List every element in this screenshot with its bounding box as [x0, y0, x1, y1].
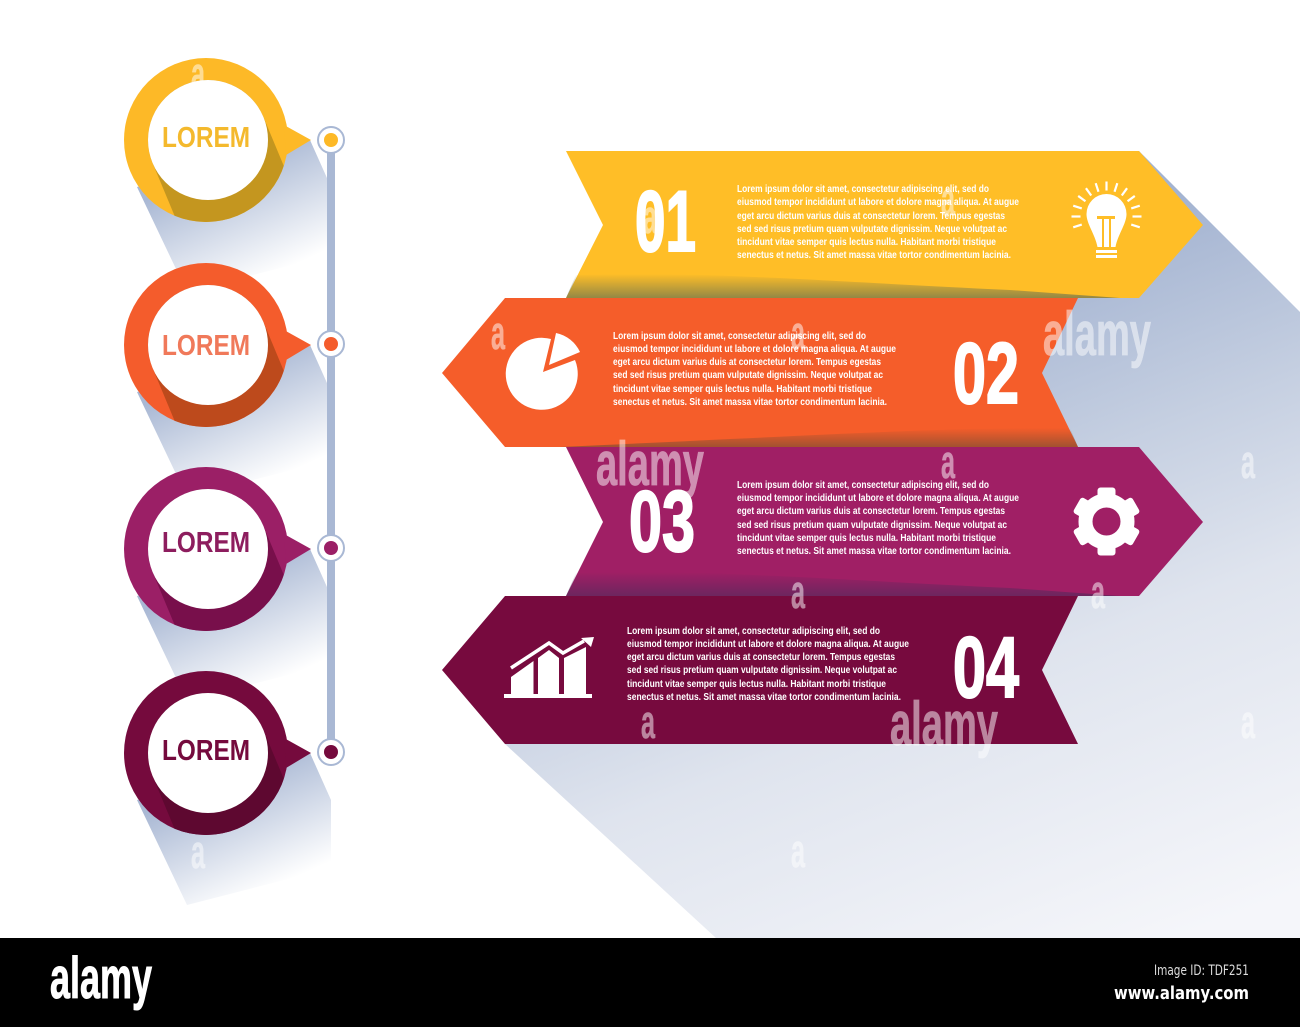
footer bar	[0, 938, 1300, 1027]
text block 04	[627, 626, 909, 703]
text block 01: tincidunt vitae semper quis lectus nulla. Habitant morbi tristique	[737, 237, 996, 248]
circle shadow 1	[137, 140, 331, 292]
circle 2: orange: LOREM	[162, 330, 250, 362]
icon: rising chart	[504, 637, 594, 698]
watermarks: alamy	[596, 430, 704, 499]
text block 04: eget arcu dictum varius duis at consectetur lorem. Tempus egestas	[627, 652, 895, 663]
circle 2: orange	[124, 263, 311, 427]
panel: banner 01	[566, 151, 1203, 298]
watermarks: a	[641, 695, 655, 748]
watermarks: a	[941, 172, 955, 225]
text block 02: eget arcu dictum varius duis at consectetur lorem. Tempus egestas	[613, 357, 881, 368]
image id: Image ID: TDF251	[1154, 963, 1249, 979]
circle shadow 2	[137, 345, 331, 497]
timeline node 4	[318, 739, 344, 765]
circle 3: purple: LOREM	[162, 527, 250, 559]
timeline node 2	[318, 331, 344, 357]
panel: banner 04	[442, 596, 1078, 744]
icon: gear	[1073, 488, 1140, 556]
text block 01	[737, 184, 1019, 261]
text block 02: eiusmod tempor incididunt ut labore et dolore magna aliqua. At augue	[613, 344, 896, 355]
website: www.alamy.com	[1114, 983, 1249, 1004]
text block 01: sed sed risus pretium quam vulputate dignissim. Neque volutpat ac	[737, 224, 1007, 235]
text block 04: senectus et netus. Sit amet massa vitae tortor condimentum lacinia.	[627, 692, 901, 703]
text block 01: Lorem ipsum dolor sit amet, consectetur adipiscing elit, sed do	[737, 184, 989, 195]
text block 02	[613, 331, 896, 408]
watermarks: a	[1091, 565, 1105, 618]
watermarks: a	[941, 435, 955, 488]
watermarks: a	[1241, 695, 1255, 748]
text block 03: eiusmod tempor incididunt ut labore et dolore magna aliqua. At augue	[737, 493, 1019, 504]
text block 04: eiusmod tempor incididunt ut labore et dolore magna aliqua. At augue	[627, 639, 909, 650]
panel: banner 03	[566, 447, 1203, 596]
text block 03: Lorem ipsum dolor sit amet, consectetur adipiscing elit, sed do	[737, 480, 989, 491]
text block 01: eiusmod tempor incididunt ut labore et dolore magna aliqua. At augue	[737, 197, 1019, 208]
text block 03	[737, 480, 1019, 557]
timeline node 3	[318, 535, 344, 561]
watermarks: a	[791, 824, 805, 877]
circle shadow 3	[137, 549, 331, 701]
watermarks: alamy	[890, 690, 998, 759]
circle 4: maroon: LOREM	[162, 735, 250, 767]
circle shadow 4	[137, 753, 331, 905]
watermarks: a	[643, 190, 657, 243]
panel: timeline of circles	[124, 58, 344, 905]
watermarks: alamy	[1043, 300, 1151, 369]
text block 04: Lorem ipsum dolor sit amet, consectetur adipiscing elit, sed do	[627, 626, 880, 637]
watermarks: a	[791, 565, 805, 618]
watermarks: a	[1241, 435, 1255, 488]
text block 03: tincidunt vitae semper quis lectus nulla. Habitant morbi tristique	[737, 533, 996, 544]
icon: pie chart	[506, 333, 580, 410]
text block 01: senectus et netus. Sit amet massa vitae tortor condimentum lacinia.	[737, 250, 1011, 261]
number 01: 01	[635, 174, 696, 270]
watermarks: a	[491, 306, 505, 359]
watermarks: a	[191, 825, 205, 878]
circle 1: yellow: LOREM	[162, 122, 250, 154]
number 04: 04	[953, 620, 1019, 716]
circle 1: yellow	[124, 58, 311, 222]
text block 01: eget arcu dictum varius duis at consectetur lorem. Tempus egestas	[737, 211, 1005, 222]
text block 02: sed sed risus pretium quam vulputate dignissim. Neque volutpat ac	[613, 370, 883, 381]
panel: banner 02	[442, 298, 1078, 447]
circle 4: maroon	[124, 671, 311, 835]
text block 02: Lorem ipsum dolor sit amet, consectetur adipiscing elit, sed do	[613, 331, 866, 342]
icon: light bulb	[1072, 182, 1142, 258]
text block 02: senectus et netus. Sit amet massa vitae tortor condimentum lacinia.	[613, 397, 887, 408]
long shadow behind banners	[505, 151, 1300, 938]
text block 04: sed sed risus pretium quam vulputate dignissim. Neque volutpat ac	[627, 665, 897, 676]
footer logo: alamy	[50, 946, 152, 1011]
text block 02: tincidunt vitae semper quis lectus nulla. Habitant morbi tristique	[613, 384, 872, 395]
circle 3: purple	[124, 467, 311, 631]
text block 04: tincidunt vitae semper quis lectus nulla. Habitant morbi tristique	[627, 679, 886, 690]
timeline node 1	[318, 127, 344, 153]
number 03: 03	[629, 474, 695, 570]
watermarks	[191, 47, 1255, 878]
text block 03: senectus et netus. Sit amet massa vitae tortor condimentum lacinia.	[737, 546, 1011, 557]
watermarks: a	[191, 47, 205, 100]
timeline line	[327, 140, 335, 752]
text block 03: sed sed risus pretium quam vulputate dignissim. Neque volutpat ac	[737, 520, 1007, 531]
watermarks: a	[791, 306, 805, 359]
text block 03: eget arcu dictum varius duis at consectetur lorem. Tempus egestas	[737, 506, 1005, 517]
number 02: 02	[953, 326, 1019, 422]
